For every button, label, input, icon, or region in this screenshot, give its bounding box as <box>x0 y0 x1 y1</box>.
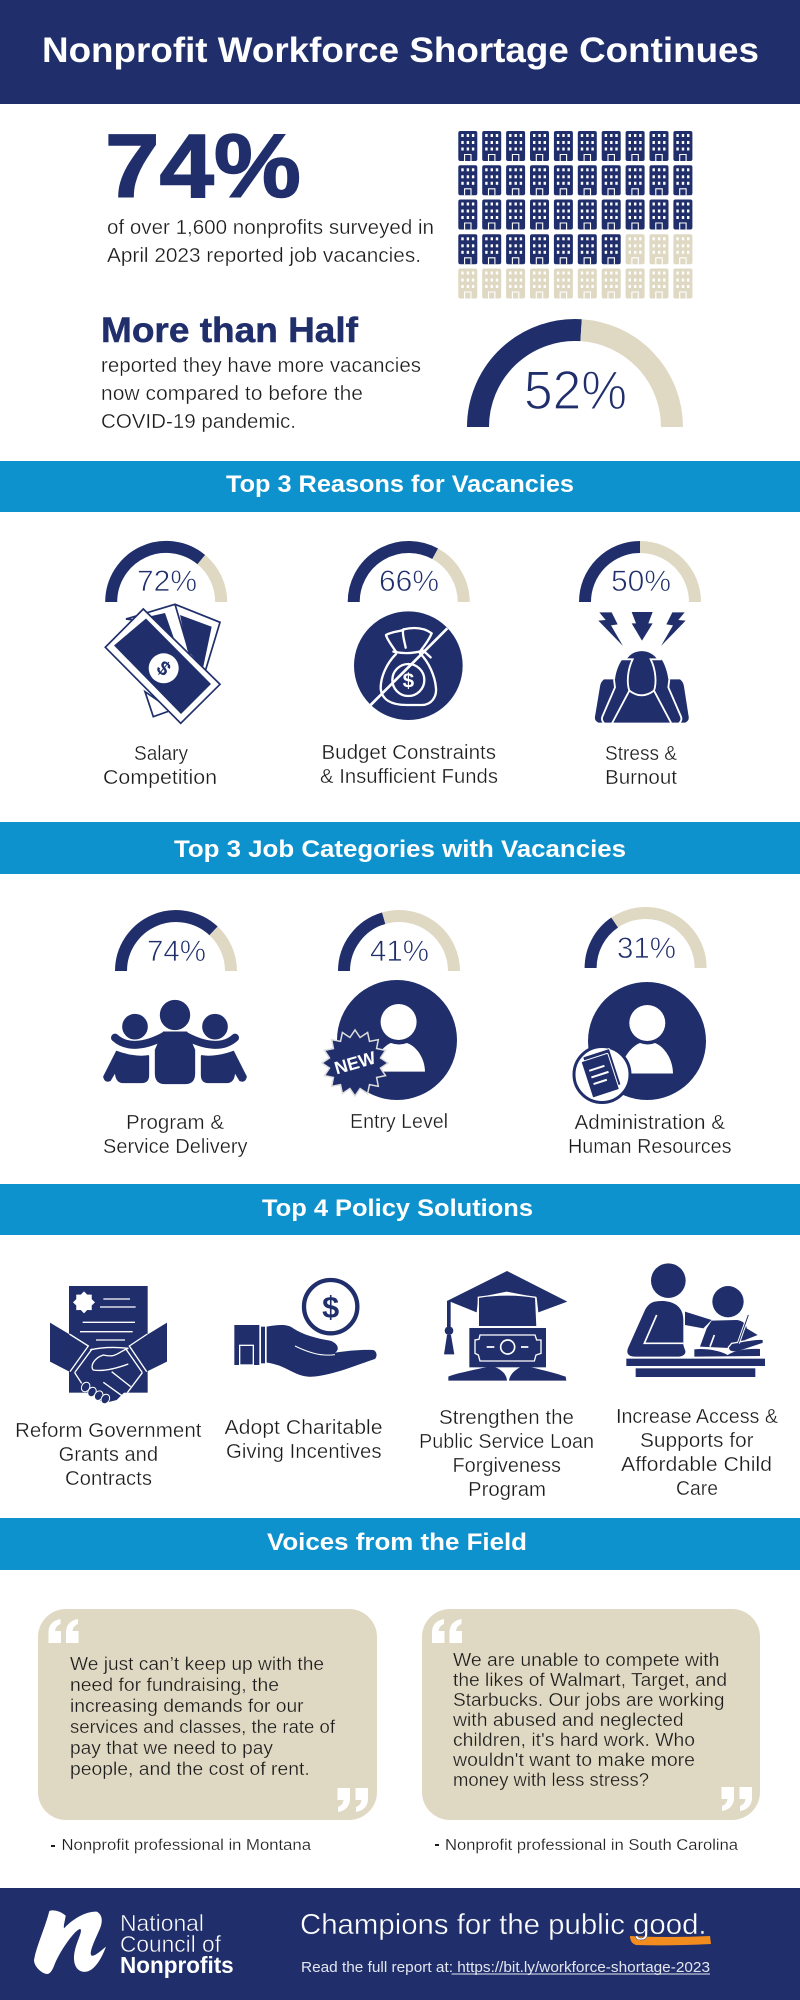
reason: salary competition <box>103 547 221 789</box>
icon: stressed person with lightning bolts <box>595 612 689 724</box>
gauge: 66 percent <box>354 547 464 602</box>
logo: National Council of Nonprofits: Council of <box>120 1931 222 1957</box>
closing quote mark <box>338 1788 368 1812</box>
label: Increase Access & <box>616 1406 779 1428</box>
attribution: South Carolina: Nonprofit professional in South Carolina <box>445 1837 738 1854</box>
label <box>224 1417 382 1463</box>
label <box>103 1112 248 1158</box>
label: Strengthen the <box>439 1407 574 1429</box>
label: Public Service Loan <box>419 1431 594 1453</box>
gauge: 41 percent: 41% <box>370 935 429 968</box>
stat: 74 percent: 74% <box>105 117 301 217</box>
quote text: people, and the cost of rent. <box>70 1758 310 1779</box>
gauge: 50 percent: 50% <box>611 565 671 598</box>
quote card: South Carolina <box>422 1609 760 1820</box>
job category: program and service delivery <box>103 916 248 1158</box>
label: Program <box>468 1479 546 1501</box>
policy: public service loan forgiveness <box>419 1271 594 1501</box>
icon: dollar bills: $ <box>152 657 175 681</box>
gauge: 72 percent: 72% <box>137 565 197 598</box>
gauge: 31 percent <box>591 913 701 968</box>
new starburst badge: NEW <box>332 1048 378 1078</box>
closing quote mark <box>722 1787 752 1811</box>
section banner: voices from the field: Voices from the Field <box>267 1529 527 1556</box>
label <box>15 1420 202 1490</box>
quote text: services and classes, the rate of <box>70 1716 336 1737</box>
quote text: increasing demands for our <box>70 1695 304 1716</box>
quote card: Montana <box>38 1609 377 1820</box>
logo: National Council of Nonprofits: Nonprofits <box>120 1952 234 1978</box>
quote text: We are unable to compete with <box>453 1649 719 1670</box>
reason: budget constraints <box>320 547 498 788</box>
section banner: top 4 policy solutions: Top 4 Policy Solutions <box>262 1195 533 1222</box>
label: Budget Constraints <box>322 742 496 764</box>
quote text: with abused and neglected <box>452 1709 684 1730</box>
stat: 74 percent <box>105 117 434 267</box>
quote text: wouldn't want to make more <box>452 1749 695 1770</box>
icon: money bag crossed out: $ <box>403 669 415 692</box>
gauge: 72 percent <box>111 547 221 602</box>
label: & Insufficient Funds <box>320 766 498 788</box>
gauge: 74 percent: 74% <box>147 935 206 968</box>
label: Service Delivery <box>103 1136 248 1158</box>
section banner: top 3 job categories: Top 3 Job Categories with Vacancies <box>174 836 626 863</box>
logo: National Council of Nonprofits <box>34 1910 234 1978</box>
label <box>568 1112 732 1158</box>
job category: administration and human resources <box>568 913 732 1158</box>
icon: three people embracing <box>104 1001 246 1083</box>
gauge: 50 percent <box>585 547 695 602</box>
stat: more than half: COVID-19 pandemic. <box>101 411 296 433</box>
opening quote mark <box>48 1619 78 1643</box>
stat: more than half: More than Half <box>101 311 358 350</box>
label: Contracts <box>65 1468 152 1490</box>
icon: hand holding coin: $ <box>322 1290 339 1324</box>
logo: National Council of Nonprofits: National <box>120 1910 204 1936</box>
quote text: need for fundraising, the <box>70 1674 279 1695</box>
label: Stress & <box>605 743 678 765</box>
quote text: money with less stress? <box>453 1769 649 1790</box>
gauge: 41 percent <box>344 916 454 971</box>
icon: adult and child at desk <box>626 1263 765 1377</box>
header banner <box>0 0 800 104</box>
pictogram: 74 of 100 buildings <box>458 131 692 298</box>
gauge: 52 percent <box>478 330 672 427</box>
policy: reform government grants <box>15 1286 202 1490</box>
document badge <box>574 1046 630 1102</box>
label: Human Resources <box>568 1136 732 1158</box>
label <box>320 742 498 788</box>
label: Adopt Charitable <box>224 1417 382 1439</box>
report link: Read the full report at: https://bit.ly/workforce-shortage-2023 <box>301 1959 710 1976</box>
label <box>419 1407 594 1501</box>
gauge: 74 percent <box>121 916 231 971</box>
label: Burnout <box>605 767 677 789</box>
icon: hand holding coin <box>234 1280 377 1377</box>
label: Forgiveness <box>452 1455 561 1477</box>
icon: dollar bills <box>105 604 220 723</box>
stat: more than half: reported they have more vacancies <box>101 355 421 377</box>
policy: adopt charitable giving incentives <box>224 1280 382 1463</box>
footer <box>0 1888 800 2000</box>
label: Program & <box>126 1112 225 1134</box>
icon: graduate with dollar bill <box>444 1271 567 1381</box>
quote text <box>70 1653 336 1779</box>
label: Affordable Child <box>621 1454 772 1476</box>
opening quote mark <box>432 1619 462 1643</box>
icon: money bag crossed out <box>354 611 463 720</box>
header banner: Nonprofit Workforce Shortage Continues <box>42 31 759 70</box>
section banner: top 3 job categories <box>0 822 800 874</box>
label <box>616 1406 779 1500</box>
label: Grants and <box>59 1444 158 1466</box>
quote text <box>452 1649 727 1790</box>
icon: new employee <box>322 980 457 1100</box>
label: Salary <box>134 743 188 765</box>
label <box>103 743 217 789</box>
section banner: top 3 reasons: Top 3 Reasons for Vacancies <box>226 471 574 498</box>
label: Entry Level <box>350 1111 448 1133</box>
reason: stress and burnout <box>585 547 695 789</box>
stat: 74 percent: April 2023 reported job vacancies. <box>107 245 421 267</box>
label: Competition <box>103 767 217 789</box>
section banner: voices from the field <box>0 1518 800 1570</box>
quote text: the likes of Walmart, Target, and <box>453 1669 727 1690</box>
section banner: top 3 reasons <box>0 461 800 512</box>
label <box>605 743 678 789</box>
gauge: 31 percent: 31% <box>617 932 676 965</box>
section banner: top 4 policy solutions <box>0 1184 800 1235</box>
stat: 74 percent: of over 1,600 nonprofits surveyed in <box>107 217 434 239</box>
policy: affordable child care <box>616 1263 779 1500</box>
quote text: Starbucks. Our jobs are working <box>453 1689 724 1710</box>
stat: more than half <box>101 311 421 433</box>
attribution: Montana: Nonprofit professional in Montana <box>62 1837 311 1854</box>
label: Care <box>676 1478 718 1500</box>
quote text: children, it's hard work. Who <box>453 1729 695 1750</box>
gauge: 52 percent: 52% <box>524 359 627 421</box>
label: Giving Incentives <box>226 1441 382 1463</box>
icon: administrator with document <box>574 982 706 1102</box>
quote text: pay that we need to pay <box>70 1737 274 1758</box>
stat: more than half: now compared to before the <box>101 383 363 405</box>
label: Supports for <box>640 1430 754 1452</box>
label: Reform Government <box>15 1420 202 1442</box>
label: Administration & <box>574 1112 726 1134</box>
tagline with orange underline: Champions for the public good. <box>300 1909 707 1941</box>
job category: entry level <box>322 916 457 1133</box>
icon: contract and handshake <box>50 1286 167 1405</box>
gauge: 66 percent: 66% <box>379 565 439 598</box>
quote text: We just can’t keep up with the <box>70 1653 324 1674</box>
